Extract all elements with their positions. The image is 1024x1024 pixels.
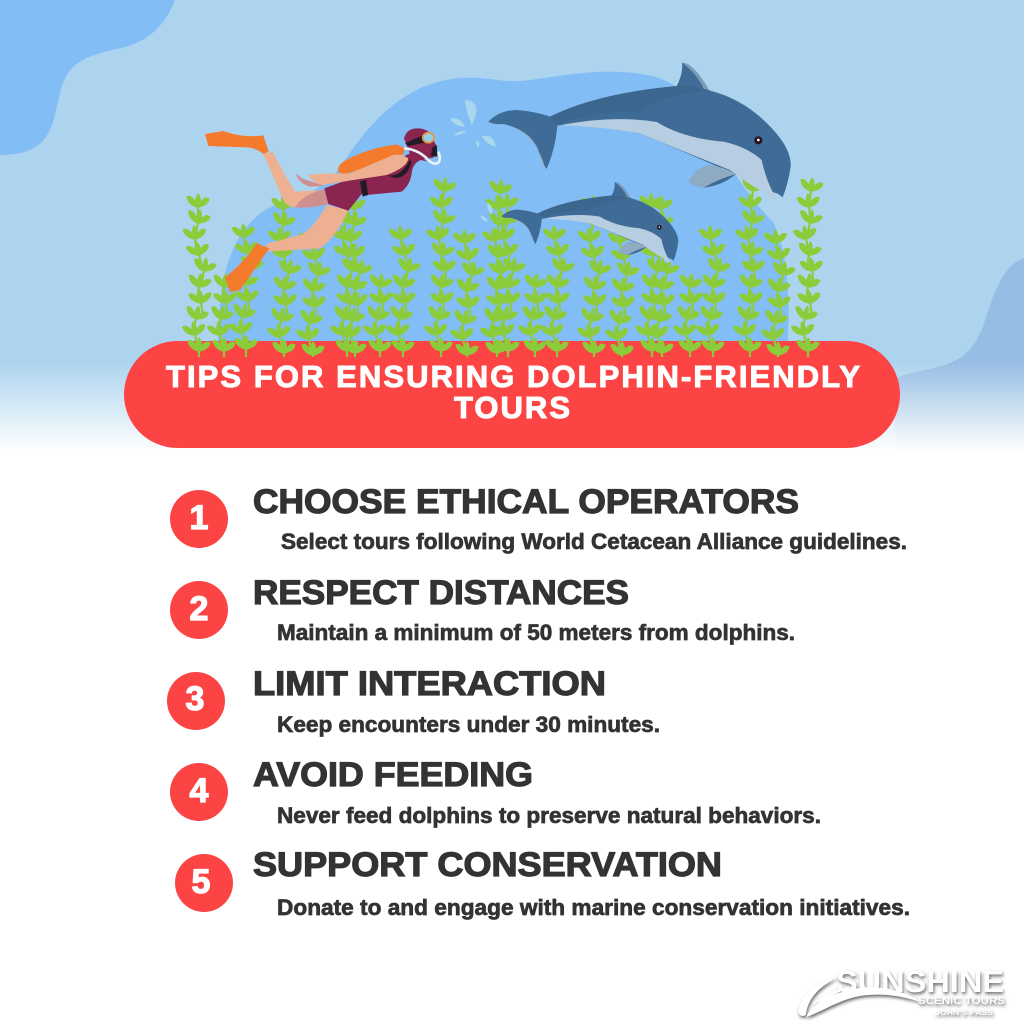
tip 1 — [170, 483, 907, 554]
description 2: Maintain a minimum of 50 meters from dolphins. — [277, 620, 795, 645]
number badge 2 — [170, 581, 228, 639]
description 1: Select tours following World Cetacean Alliance guidelines. — [281, 529, 907, 554]
fade to white — [0, 362, 1024, 452]
title: TOURS — [454, 390, 570, 425]
lower leg — [266, 205, 348, 251]
logo: SUNSHINE — [836, 964, 1004, 999]
logo: JOHN'S PASS — [935, 1010, 993, 1017]
water splash: small dolphin — [480, 203, 492, 222]
logo: SCENIC TOURS — [918, 996, 1005, 1007]
logo — [798, 964, 1005, 1017]
title pill — [124, 341, 900, 448]
tip 4 — [170, 756, 821, 828]
number badge 1 — [170, 490, 228, 548]
number badge 3 — [167, 672, 225, 730]
tip 2 — [170, 574, 795, 645]
number badge 2: 2 — [190, 590, 208, 628]
blob: centre — [218, 72, 789, 350]
title: TIPS FOR ENSURING DOLPHIN-FRIENDLY — [166, 359, 860, 394]
number badge 4 — [170, 763, 228, 821]
title — [166, 359, 860, 425]
description 5: Donate to and engage with marine conservation initiatives. — [277, 895, 910, 920]
tip 3 — [167, 665, 660, 737]
hood — [404, 128, 437, 160]
heading 3: LIMIT INTERACTION — [253, 665, 606, 703]
water splash: big dolphin — [450, 100, 496, 147]
number badge 5: 5 — [192, 863, 210, 901]
upper leg — [263, 152, 328, 208]
bottom fin — [225, 243, 269, 292]
seaweed — [182, 177, 825, 370]
heading 2: RESPECT DISTANCES — [253, 574, 629, 612]
arm — [308, 155, 408, 185]
top fin — [205, 131, 269, 154]
number badge 5 — [175, 854, 233, 912]
wetsuit — [324, 153, 428, 211]
blob: top left — [0, 0, 175, 155]
small dolphin — [501, 182, 678, 262]
heading 1: CHOOSE ETHICAL OPERATORS — [253, 483, 799, 521]
description 4: Never feed dolphins to preserve natural behaviors. — [277, 803, 821, 828]
number badge 4: 4 — [190, 772, 209, 810]
blob: right — [895, 258, 1024, 460]
diver — [205, 128, 440, 292]
tank — [338, 144, 405, 175]
heading 5: SUPPORT CONSERVATION — [253, 846, 722, 884]
heading 4: AVOID FEEDING — [253, 756, 533, 794]
snorkel — [404, 148, 440, 164]
tip 5 — [175, 846, 910, 920]
number badge 3: 3 — [186, 680, 204, 718]
description 3: Keep encounters under 30 minutes. — [277, 712, 660, 737]
number badge 1: 1 — [190, 499, 208, 537]
large dolphin — [488, 63, 791, 200]
